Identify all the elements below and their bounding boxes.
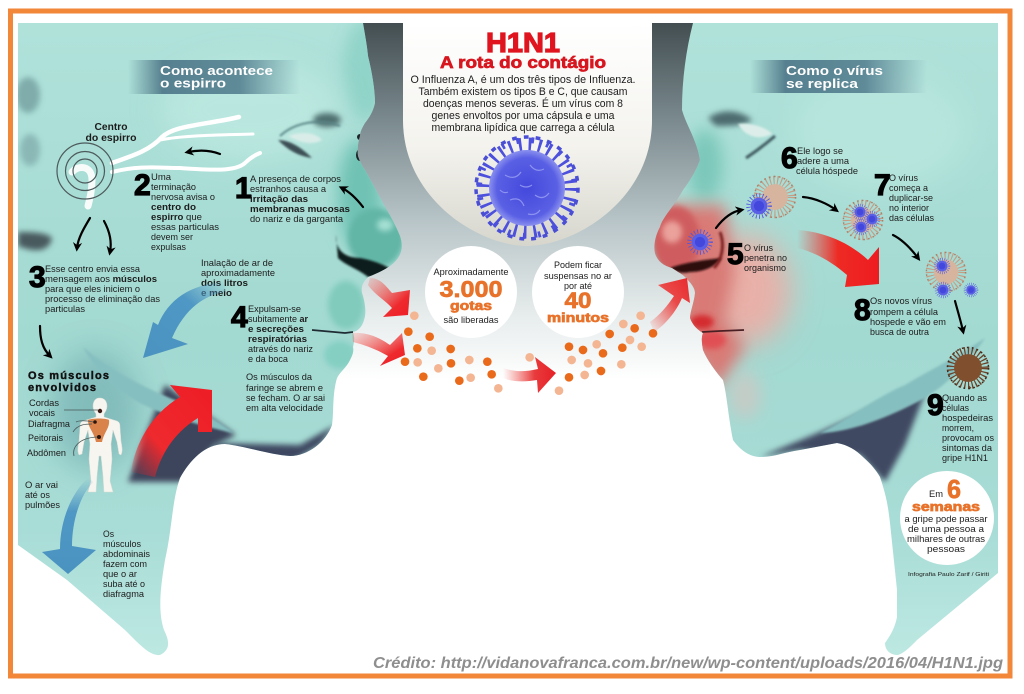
step 4: respiratórias (248, 334, 307, 345)
body figure with muscles (64, 398, 122, 492)
droplets (401, 311, 657, 395)
step 6: adere a uma (797, 156, 850, 167)
step 5: 5 (727, 238, 744, 271)
step 7: duplicar-se (889, 193, 933, 204)
heading: os músculos envolvidos: Os músculos (28, 370, 109, 382)
callout: 6 weeks: de uma pessoa a (908, 524, 985, 535)
callout: 3,000 droplets: Aproximadamente (434, 267, 508, 278)
pharynx note (246, 372, 325, 414)
step 2: terminação (151, 182, 196, 193)
callout: 6 weeks: a gripe pode passar (904, 514, 988, 525)
abdominal note: fazem com (103, 559, 147, 570)
intro text block: Também existem os tipos B e C, que causam (418, 86, 628, 98)
step 4 (231, 301, 313, 365)
band heading: como o vírus se replica (750, 60, 927, 93)
step 2: expulsas (151, 242, 186, 253)
step 8: rompem a célula (870, 307, 939, 318)
step 6: célula hóspede (796, 166, 858, 177)
intro text block: genes envoltos por uma cápsula e uma (432, 110, 615, 122)
inhalation note: e meio (201, 288, 232, 299)
black arrows on left face (40, 151, 363, 356)
icon: dead cell (947, 347, 989, 389)
step 4: e secreções (248, 324, 304, 335)
step 4: através do nariz (248, 344, 313, 355)
arrow: air to lungs (blue) (42, 478, 96, 574)
callout: 6 weeks: Em (929, 489, 943, 500)
callout: 6 weeks: pessoas (927, 544, 965, 555)
arrow: droplets into nose (650, 278, 690, 332)
step 7: das células (889, 213, 934, 224)
step 9: hospedeiras (942, 413, 993, 424)
step 9: morrem, (942, 423, 974, 434)
abdominal note: diafragma (103, 589, 145, 600)
panel: right face, how the virus replicates (650, 23, 998, 655)
arrow: from nose to droplets (368, 278, 410, 317)
step 8: busca de outra (870, 327, 930, 338)
callout: 40 minutes: Podem ficar (554, 260, 602, 271)
title: A rota do contágio (440, 53, 606, 72)
step 9: células (942, 403, 969, 414)
icon: virus duplicating in cell (843, 200, 883, 240)
icon: virus in nose (689, 231, 711, 253)
step 3: 3 (29, 261, 46, 294)
label: centro do espirro: do espirro (86, 133, 136, 144)
step 2: centro do (151, 202, 196, 213)
muscle labels: Cordas (29, 398, 59, 409)
inhalation note (201, 258, 275, 299)
callout: 3,000 droplets: 3.000 (440, 276, 502, 302)
black arrows on right face (716, 197, 963, 331)
arrow: air rising (red) (131, 385, 212, 477)
step 7: começa a (889, 183, 929, 194)
callout: 6 weeks: milhares de outras (907, 534, 985, 545)
step 2: devem ser (151, 232, 193, 243)
step 8: hospede e vão em (870, 317, 946, 328)
band heading: como o vírus se replica: se replica (786, 76, 859, 91)
step 9: gripe H1N1 (942, 453, 988, 464)
abdominal note (103, 529, 150, 600)
step 5: penetra no (744, 253, 787, 264)
byline: Infografia Paulo Zarif / Giriti (908, 572, 989, 578)
band heading: como o vírus se replica: Como o vírus (786, 63, 883, 78)
muscle labels: Peitorais (28, 433, 63, 444)
step 9 (927, 389, 994, 464)
step 3: processo de eliminação das (45, 294, 160, 305)
step 4: e da boca (248, 354, 289, 365)
step 8: 8 (854, 294, 871, 327)
step 3: particulas (45, 304, 85, 315)
central background gradient (340, 23, 710, 380)
step 4: Expulsam-se (248, 304, 301, 315)
label: centro do espirro: Centro (94, 122, 128, 133)
muscle labels: vocais (29, 408, 55, 419)
lungs note: até os (25, 490, 50, 501)
title: H1N1 (486, 27, 560, 58)
step 5: organismo (744, 263, 786, 274)
step 7: no interior (889, 203, 929, 214)
step 7: O vírus (889, 173, 918, 184)
callout: 40 minutes: 40 (564, 288, 592, 313)
step 1: 1 (235, 172, 252, 205)
callout: 3,000 droplets: são liberadas (444, 315, 499, 326)
intro text block: membrana lipídica que carrega a célula (432, 122, 615, 134)
step 9: sintomas da (942, 443, 993, 454)
step 9: provocam os (942, 433, 994, 444)
callout: 6 weeks: 6 (947, 474, 961, 504)
step 7: 7 (874, 169, 891, 202)
step 7 (874, 169, 934, 224)
step 2: nervosa avisa o (151, 192, 215, 203)
icon: sneeze centre target (57, 143, 113, 199)
arrow: replication (red) (797, 230, 879, 287)
step 2: espirro que (151, 212, 202, 223)
step 9: 9 (927, 389, 944, 422)
step 2 (134, 169, 219, 253)
step 2: 2 (134, 169, 151, 202)
abdominal note: abdominais (103, 549, 150, 560)
muscle labels: Diafragma (28, 419, 71, 430)
arrow: droplets travelling (503, 357, 556, 393)
step 6: Ele logo se (797, 146, 843, 157)
icon: large H1N1 virus (476, 137, 578, 239)
step 3: Esse centro envia essa (45, 264, 141, 275)
pharynx note: faringe se abrem e (246, 383, 323, 394)
callout: 3,000 droplets: gotas (450, 298, 492, 313)
callout: 40 minutes: por até (564, 281, 592, 292)
label: centro do espirro (86, 122, 136, 144)
band heading: como acontece o espirro: o espirro (160, 76, 226, 90)
callout: 6 weeks: semanas (912, 500, 980, 514)
intro text block: O Influenza A, é um dos três tipos de Influenza. (410, 74, 636, 86)
callout: 40 minutes: minutos (547, 310, 609, 325)
band heading: como acontece o espirro: Como acontece (160, 63, 273, 78)
step 3: para que eles iniciem o (45, 284, 140, 295)
muscle labels (27, 398, 71, 459)
inhalation note: dois litros (201, 278, 248, 289)
heading: os músculos envolvidos (28, 370, 109, 394)
step 3 (29, 261, 160, 315)
lungs note (25, 480, 60, 511)
step 5 (727, 238, 787, 274)
title (440, 27, 606, 72)
pharynx note: em alta velocidade (246, 403, 323, 414)
inhalation note: aproximadamente (201, 268, 275, 279)
step 3: mensagem aos músculos (45, 274, 157, 285)
step 4: subitamente ar (248, 314, 308, 325)
callout: 40 minutes: suspensas no ar (544, 271, 612, 282)
abdominal note: Os (103, 529, 114, 540)
step 6: 6 (781, 142, 798, 175)
step 1: membranas mucosas (250, 204, 350, 215)
lungs note: O ar vai (25, 480, 58, 491)
callout: 6 weeks (900, 471, 994, 565)
step 8: Os novos vírus (870, 296, 932, 307)
muscle labels: Abdômen (27, 448, 66, 459)
bowl: central title panel (403, 23, 652, 246)
step 1 (235, 172, 350, 225)
step 9: Quando as (942, 393, 987, 404)
step 1: estranhos causa a (250, 184, 327, 195)
intro text block: doenças menos severas. É um vírus com 8 (423, 97, 623, 110)
intro text block (410, 74, 636, 134)
nerve pathways (72, 117, 260, 206)
step 5: O vírus (744, 243, 773, 254)
inhalation note: Inalação de ar de (201, 258, 273, 269)
step 6 (781, 142, 858, 177)
step 8 (854, 294, 946, 338)
step 1: do nariz e da garganta (250, 214, 344, 225)
arrow: from mouth to droplets (352, 333, 405, 366)
pharynx note: se fecham. O ar sai (246, 393, 325, 404)
callout: 40 minutes (532, 246, 624, 338)
step 2: essas particulas (151, 222, 219, 233)
heading: os músculos envolvidos: envolvidos (28, 382, 96, 394)
icon: new viruses leaving cell (926, 252, 977, 297)
callout: 3,000 droplets (425, 246, 517, 338)
abdominal note: músculos (103, 539, 141, 550)
image credit: Crédito: http://vidanovafranca.com.br/new/wp-content/uploads/2016/04/H1N1.jpg (373, 655, 1004, 672)
step 1: irritação das (250, 194, 308, 205)
step 4: 4 (231, 301, 248, 334)
abdominal note: suba até o (103, 579, 145, 590)
arrow: inhaled air (blue) (143, 282, 225, 358)
pharynx note: Os músculos da (246, 372, 313, 383)
lungs note: pulmões (25, 500, 60, 511)
abdominal note: que o ar (103, 569, 137, 580)
band heading: como acontece o espirro (128, 60, 300, 94)
icon: virus attaching to host cell (748, 176, 796, 218)
step 1: A presença de corpos (250, 174, 341, 185)
panel: left face, how the sneeze happens (16, 20, 404, 655)
step 2: Uma (151, 172, 172, 183)
